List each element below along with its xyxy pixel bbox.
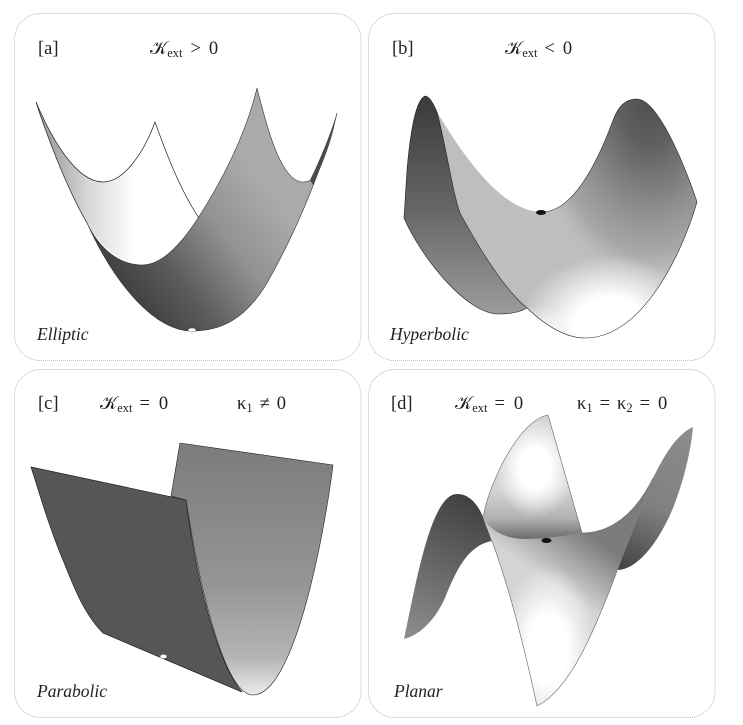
- formula: K ext equals zero: =: [494, 394, 505, 414]
- formula: kappa 1 not zero: 1: [246, 401, 253, 415]
- panel: planar surface: [368, 370, 715, 725]
- caption: Hyperbolic: Hyperbolic: [389, 324, 469, 344]
- caption: Elliptic: Elliptic: [36, 324, 89, 344]
- panel: hyperbolic surface: [368, 13, 716, 361]
- formula: K ext equals zero: 0: [159, 394, 168, 414]
- caption: Planar: Planar: [393, 681, 443, 701]
- label: [d]: [d]: [391, 394, 413, 414]
- panel: parabolic surface: [14, 370, 361, 718]
- formula: kappa 1 equals kappa 2 equals zero: κ: [617, 394, 627, 414]
- formula: K ext equals zero: 0: [514, 394, 523, 414]
- marker: black point: [542, 538, 552, 543]
- formula: K ext greater than zero: >: [190, 39, 201, 59]
- formula: kappa 1 equals kappa 2 equals zero: 1: [586, 401, 593, 415]
- formula: kappa 1 equals kappa 2 equals zero: =: [600, 394, 610, 414]
- formula: K ext equals zero: ext: [117, 401, 133, 415]
- formula: K ext less than zero: 0: [563, 39, 572, 59]
- label: [b]: [b]: [392, 39, 414, 59]
- marker: white point: [160, 654, 167, 659]
- marker: black point: [536, 210, 546, 215]
- formula: kappa 1 not zero: ≠: [260, 394, 270, 414]
- formula: kappa 1 not zero: 0: [277, 394, 286, 414]
- formula: K ext equals zero: 𝒦: [455, 394, 472, 414]
- formula: kappa 1 equals kappa 2 equals zero: κ: [577, 394, 586, 414]
- formula: K ext equals zero: ext: [472, 401, 488, 415]
- formula: K ext less than zero: <: [544, 39, 555, 59]
- marker: white point: [188, 328, 196, 332]
- formula: K ext greater than zero: 0: [209, 39, 218, 59]
- formula: K ext less than zero: 𝒦: [505, 39, 522, 59]
- formula: K ext greater than zero: 𝒦: [150, 39, 167, 59]
- caption: Parabolic: Parabolic: [36, 681, 107, 701]
- formula: kappa 1 equals kappa 2 equals zero: 0: [658, 394, 667, 414]
- formula: kappa 1 equals kappa 2 equals zero: =: [640, 394, 650, 414]
- surface: elliptic paraboloid: [36, 88, 337, 332]
- panel: elliptic surface: [14, 14, 361, 360]
- formula: kappa 1 not zero: κ: [237, 394, 246, 414]
- surface: parabolic cylinder: [31, 443, 333, 695]
- label: [a]: [a]: [38, 39, 59, 59]
- surface: monkey saddle: [404, 414, 693, 706]
- formula: K ext equals zero: 𝒦: [100, 394, 117, 414]
- formula: kappa 1 equals kappa 2 equals zero: 2: [626, 401, 633, 415]
- label: [c]: [c]: [38, 394, 59, 414]
- formula: K ext less than zero: ext: [522, 46, 538, 60]
- formula: K ext equals zero: =: [139, 394, 150, 414]
- surface: saddle: [404, 96, 698, 338]
- formula: K ext greater than zero: ext: [167, 46, 183, 60]
